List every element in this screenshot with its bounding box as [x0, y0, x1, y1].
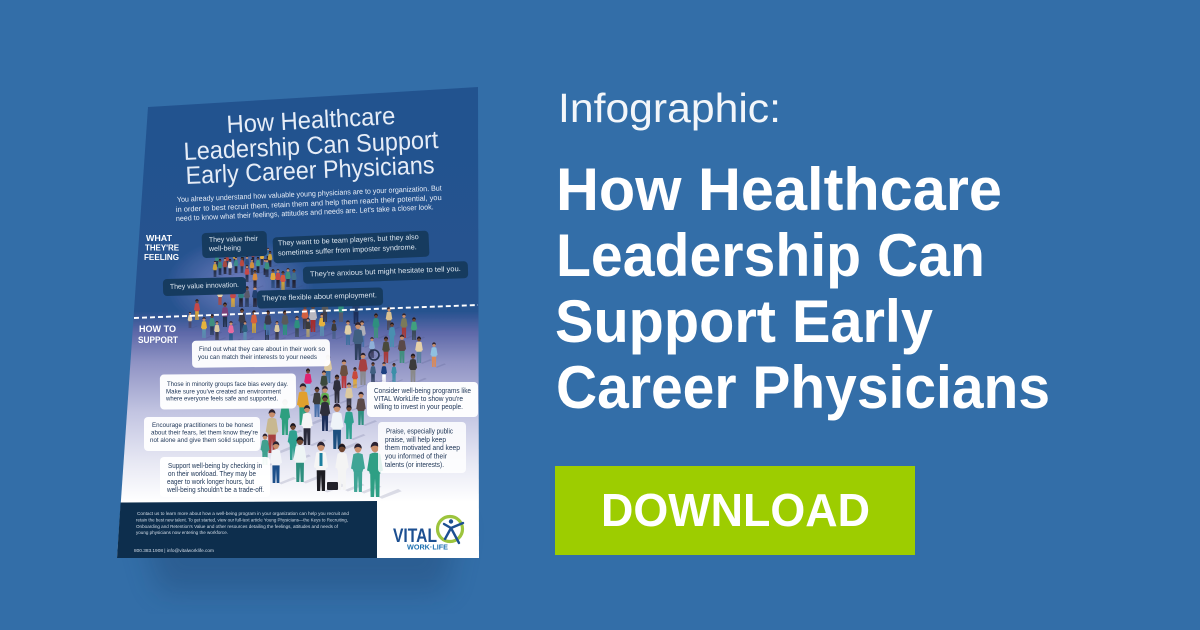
- support bubble: encourage practitioners: [144, 417, 260, 451]
- feeling bubble: team players: They want to be team players, but they also: [278, 232, 419, 247]
- support bubble: minority groups: where everyone feels safe and supported.: [165, 396, 278, 402]
- dashed divider: [134, 305, 478, 318]
- panel: tilted infographic poster: [117, 87, 479, 558]
- support bubble: check in on workload: [160, 457, 270, 497]
- support bubble: minority groups: Those in minority groups face bias every day.: [167, 381, 288, 388]
- poster drop shadow: [140, 520, 460, 592]
- main heading: [555, 156, 1050, 421]
- poster intro paragraph: [176, 183, 442, 223]
- feeling bubble: anxious: [303, 261, 468, 284]
- feeling bubble: anxious: They're anxious but might hesitate to tell you.: [310, 264, 461, 278]
- crowd: middle figures: [188, 296, 446, 411]
- support bubble: find out what they care about: Find out what they care about in their work so: [199, 346, 325, 353]
- main heading: Career Physicians: [556, 354, 1050, 421]
- logo: VITAL WorkLife: WORK·LIFE: [407, 544, 448, 552]
- feeling bubble: well-being: well-being: [208, 243, 241, 253]
- support bubble: check in on workload: well-being shouldn't be a trade-off.: [166, 485, 264, 494]
- crowd: small distant figures: [213, 248, 303, 308]
- support bubble: consider well-being programs: willing to invest in your people.: [373, 402, 463, 411]
- section heading: how to support: HOW TO: [139, 324, 177, 335]
- feeling bubble: team players: sometimes suffer from imposter syndrome.: [278, 242, 417, 257]
- support bubble: minority groups: Make sure you've created an environment: [166, 388, 281, 396]
- feeling bubble: innovation: [163, 277, 246, 296]
- support bubble: check in on workload: eager to work longer hours, but: [167, 477, 254, 486]
- download button: DOWNLOAD: [601, 484, 870, 536]
- footer paragraph: Onboarding and Retention's Value and other resources detailing the feelings, attitudes and needs of: [136, 524, 339, 529]
- support bubble: find out what they care about: [192, 339, 330, 368]
- logo: VITAL WorkLife: VITAL: [393, 526, 437, 547]
- support bubble: find out what they care about: you can match their interests to your needs: [198, 354, 318, 361]
- section heading: what they're feeling: [144, 233, 179, 262]
- poster title: How Healthcare: [226, 102, 396, 139]
- poster title: Early Career Physicians: [185, 151, 435, 190]
- feeling bubble: innovation: They value innovation.: [170, 280, 239, 291]
- support bubble: encourage practitioners: about their fears, let them know they're: [151, 430, 258, 436]
- support bubble: praise: them motivated and keep: [385, 443, 460, 452]
- logo figure: [444, 519, 463, 543]
- support bubble: minority groups: [160, 373, 296, 410]
- medical bag: [327, 482, 338, 490]
- support bubble: consider well-being programs: VITAL WorkLife to show you're: [374, 394, 463, 403]
- support bubble: praise: [378, 422, 466, 473]
- feeling bubble: team players: [273, 231, 429, 263]
- support bubble: praise: talents (or interests).: [385, 460, 444, 469]
- main heading: Support Early: [555, 288, 934, 355]
- feeling bubble: well-being: [202, 231, 267, 258]
- support bubble: check in on workload: on their workload. They may be: [168, 469, 256, 478]
- poster sheet: [117, 87, 479, 558]
- section heading: what they're feeling: FEELING: [144, 252, 179, 262]
- crowd: near figures: [260, 383, 402, 499]
- logo: VITAL WorkLife: [393, 516, 463, 552]
- support bubble: check in on workload: Support well-being by checking in: [168, 461, 262, 470]
- footer paragraph: Contact us to learn more about how a well-being program in your organization can help you recruit and: [137, 511, 349, 516]
- support bubble: consider well-being programs: Consider well-being programs like: [374, 386, 471, 395]
- footer contact line: 800.383.1908 | info@vitalworklife.com: [134, 548, 214, 553]
- logo ring: [438, 516, 462, 542]
- poster intro paragraph: in order to best recruit them, retain them and help them reach their potential, you: [176, 193, 442, 214]
- doctor shirt detail: [320, 453, 322, 466]
- footer panel: [117, 501, 377, 558]
- support bubble: encourage practitioners: Encourage practitioners to be honest: [152, 422, 253, 429]
- feeling bubble: flexible: [257, 287, 383, 309]
- section heading: how to support: [138, 324, 178, 346]
- main heading: Leadership Can: [556, 222, 985, 289]
- poster title: [183, 102, 439, 190]
- section heading: what they're feeling: WHAT: [146, 233, 173, 243]
- poster title: Leadership Can Support: [183, 126, 439, 166]
- footer paragraph: [136, 511, 349, 535]
- support bubble: praise: you informed of their: [385, 452, 448, 460]
- feeling bubble: well-being: They value their: [209, 234, 259, 244]
- poster intro paragraph: need to know what their feelings, attitudes and needs are. Let's take a closer look.: [176, 202, 434, 223]
- feeling bubble: flexible: They're flexible about employment.: [262, 290, 377, 303]
- support bubble: encourage practitioners: not alone and give them solid support.: [150, 437, 255, 444]
- support bubble: praise: praise, will help keep: [385, 435, 446, 444]
- main heading: How Healthcare: [556, 156, 1002, 223]
- support bubble: consider well-being programs: [367, 382, 478, 417]
- support bubble: praise: Praise, especially public: [386, 426, 453, 436]
- footer paragraph: retain the best new talent. To get started, view our full-text article Young Physicians—the Keys to Recruiting,: [136, 518, 348, 522]
- footer paragraph: young physicians now entering the workforce.: [136, 530, 228, 535]
- section heading: what they're feeling: THEY'RE: [145, 242, 179, 252]
- download button: [555, 466, 915, 555]
- poster intro paragraph: You already understand how valuable young physicians are to your organization. But: [177, 183, 442, 204]
- section heading: how to support: SUPPORT: [138, 335, 178, 346]
- crowd glow: [165, 237, 315, 333]
- eyebrow: Infographic: Infographic:: [558, 85, 781, 131]
